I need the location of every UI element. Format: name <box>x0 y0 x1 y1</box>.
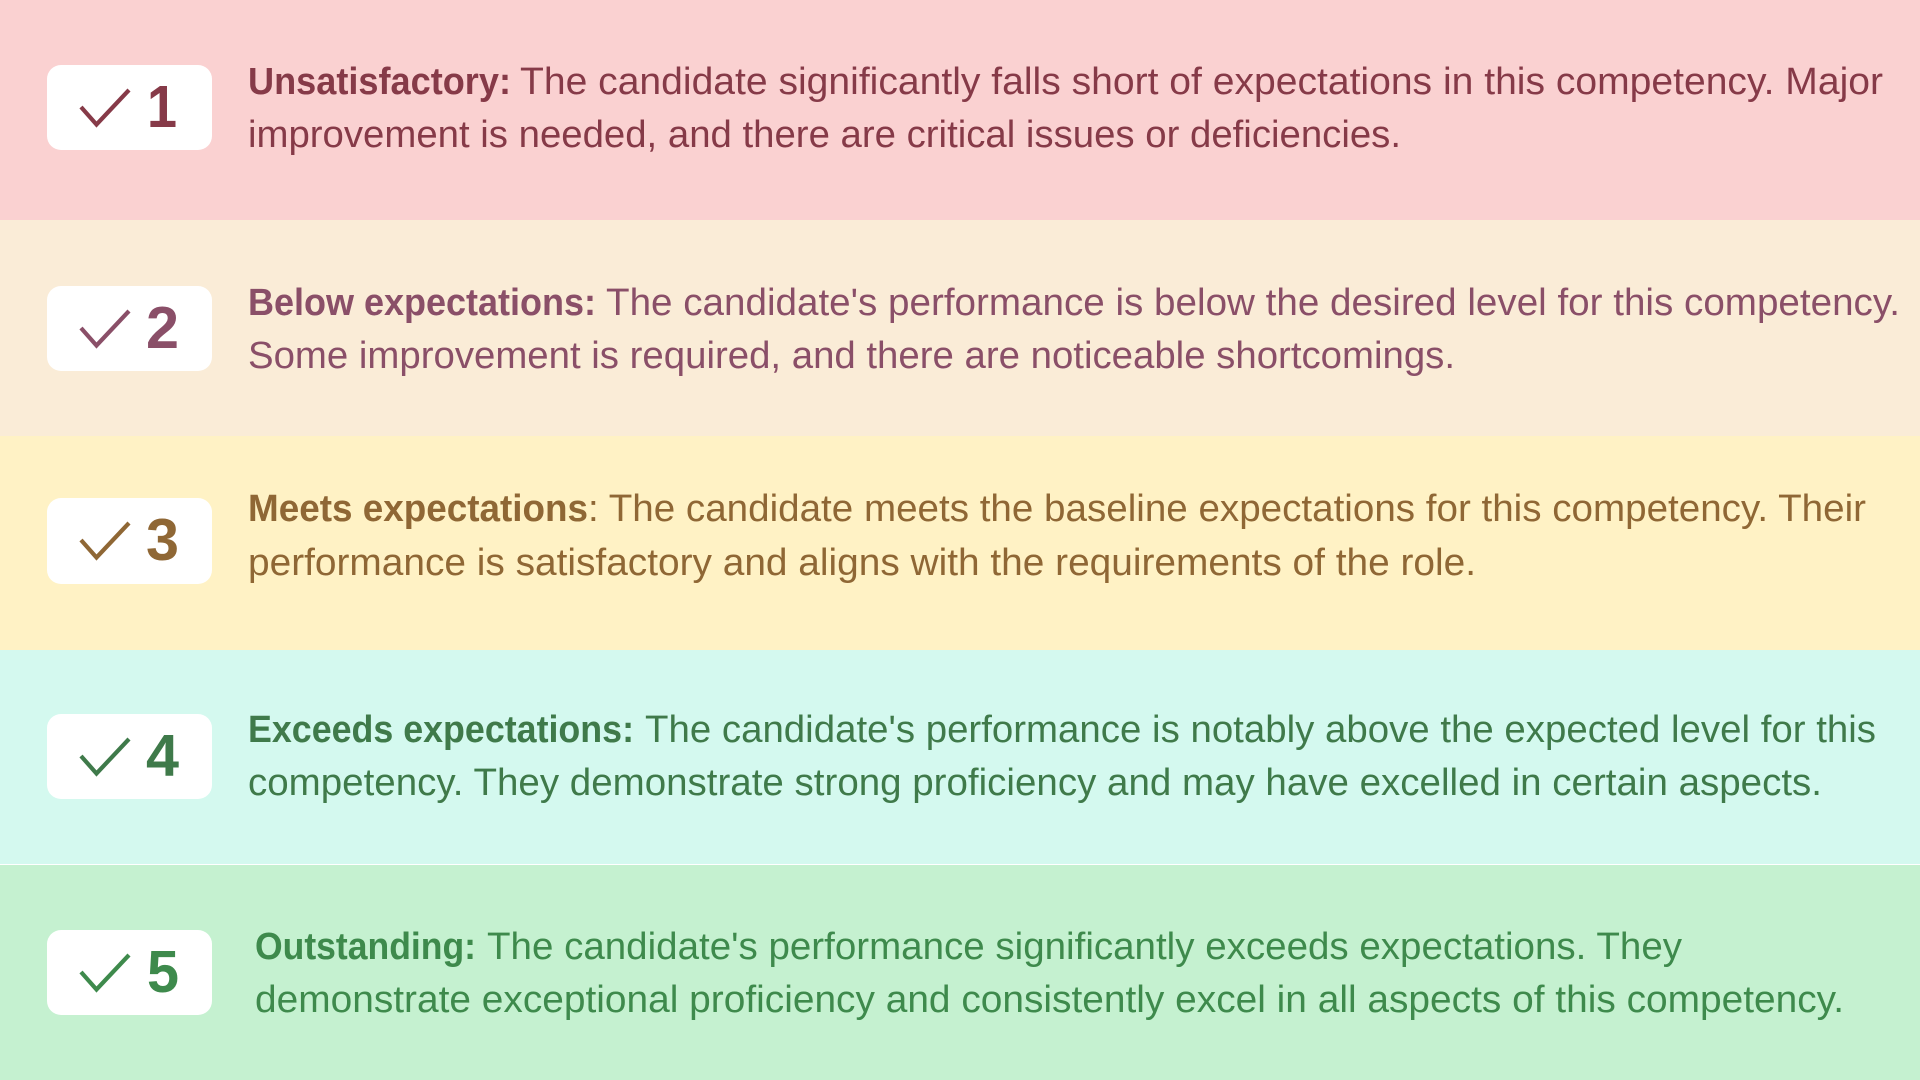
panel: rating 5 outstanding <box>0 865 1920 1080</box>
panel: rating 3 meets expectations <box>0 436 1920 650</box>
text: outstanding description: The candidate's performance significantly exceeds expectations. They <box>487 926 1682 968</box>
text: unsatisfactory description: improvement is needed, and there are critical issues or deficiencies. <box>248 114 1401 156</box>
text: unsatisfactory description <box>248 61 1883 156</box>
badge: rating 4 <box>47 714 212 799</box>
panel: rating 4 exceeds expectations <box>0 650 1920 864</box>
badge: rating 2 <box>47 286 212 371</box>
text: exceeds expectations description: competency. They demonstrate strong proficiency and may have excelled in certain aspects. <box>248 762 1822 804</box>
text: meets expectations description: Meets expectations <box>248 488 588 530</box>
text: meets expectations description: performance is satisfactory and aligns with the requirements of the role. <box>248 542 1476 584</box>
text: below expectations description: Some improvement is required, and there are noticeable shortcomings. <box>248 335 1455 377</box>
text: below expectations description: Below expectations: <box>248 282 596 324</box>
text: outstanding description <box>255 926 1844 1021</box>
text: exceeds expectations description <box>248 709 1876 804</box>
text: outstanding description: demonstrate exceptional proficiency and consistently excel in all aspects of this competency. <box>255 979 1844 1021</box>
badge: rating 4: 4 <box>146 723 179 789</box>
badge: rating 5 <box>47 930 212 1015</box>
badge: rating 2: 2 <box>146 295 179 361</box>
text: exceeds expectations description: Exceeds expectations: <box>248 709 634 751</box>
badge: rating 1: 1 <box>147 74 177 140</box>
badge: rating 5: 5 <box>147 939 179 1005</box>
badge: rating 3: 3 <box>146 507 179 573</box>
text: meets expectations description <box>248 488 1866 584</box>
text: exceeds expectations description: The candidate's performance is notably above the expected level for this <box>645 709 1876 751</box>
panel: rating 1 unsatisfactory <box>0 0 1920 220</box>
text: unsatisfactory description: The candidate significantly falls short of expectations in this competency. Major <box>520 61 1883 103</box>
panel: rating 2 below expectations <box>0 220 1920 436</box>
text: below expectations description: The candidate's performance is below the desired level for this competency. <box>606 282 1900 324</box>
text: outstanding description: Outstanding: <box>255 926 476 968</box>
text: below expectations description <box>248 282 1900 377</box>
text: meets expectations description: : The candidate meets the baseline expectations for this competency. Their <box>588 488 1866 530</box>
badge: rating 3 <box>47 498 212 584</box>
text: unsatisfactory description: Unsatisfactory: <box>248 61 511 103</box>
badge: rating 1 <box>47 65 212 150</box>
